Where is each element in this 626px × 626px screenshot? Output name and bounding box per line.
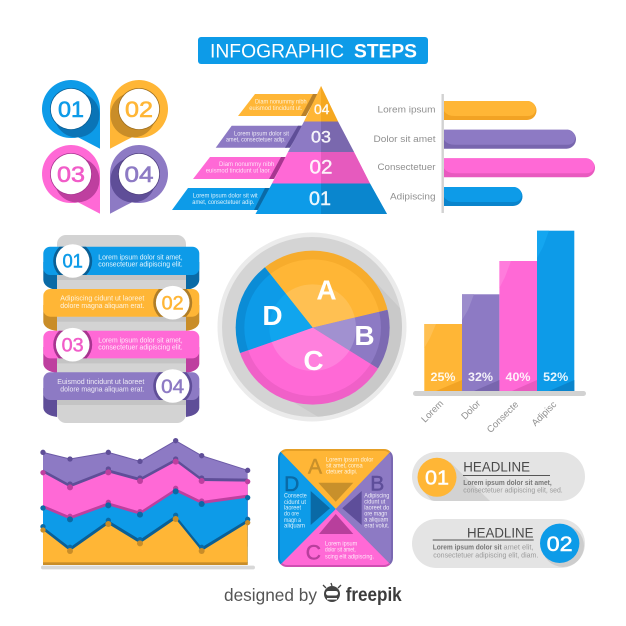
section text: laoreet do <box>364 505 390 512</box>
pyramid numbers: 03 <box>311 128 331 147</box>
step 01 band <box>43 242 199 290</box>
horizontal bar chart <box>374 94 595 213</box>
section text: Lorem ipsum dolor <box>326 456 374 463</box>
yellow layer <box>43 519 248 565</box>
section text: ctetuer adipi. <box>326 468 357 475</box>
section text <box>284 456 390 560</box>
headline pill 02: consectetuer adipiscing elit, diam. <box>433 550 538 559</box>
data points <box>40 438 250 487</box>
section text: laoreet <box>284 504 301 511</box>
step 03 band: Lorem ipsum dolor sit amet, <box>98 336 183 345</box>
ribbon 02: Diam nonummy nibh <box>219 161 274 168</box>
ribbon 04 <box>238 94 320 116</box>
footer credit <box>224 583 402 606</box>
pyramid layers <box>304 86 338 122</box>
blue layer <box>43 491 248 563</box>
pin 03: 03 <box>57 162 85 187</box>
column baseline <box>413 391 586 396</box>
bar labels: Lorem ipsum <box>378 104 436 116</box>
pin 04: 04 <box>124 162 154 187</box>
bar labels: Dolor sit amet <box>374 134 436 145</box>
yellow layer edge <box>43 515 248 563</box>
pie chart <box>218 232 406 422</box>
pie letters: B <box>354 320 375 351</box>
numbered location pins <box>42 80 168 214</box>
column labels <box>419 398 559 436</box>
pie letters: C <box>303 345 324 376</box>
ribbon 01: Lorem ipsum dolor sit wit <box>193 192 258 199</box>
pyramid numbers: 01 <box>309 189 331 210</box>
bar: lorem ipsum <box>444 101 536 120</box>
column 40%: 40% <box>506 372 530 384</box>
pie backing disc <box>218 232 406 422</box>
ribbon 02 <box>193 157 286 179</box>
section text: magn a <box>284 517 301 524</box>
section text: ore magn <box>364 510 388 518</box>
grey backing <box>57 235 186 423</box>
column 52%: 52% <box>543 372 568 384</box>
column 32%: 32% <box>468 372 493 384</box>
footer credit: freepik <box>346 585 402 606</box>
pyramid numbers: 02 <box>310 157 332 178</box>
ribbon 01: amet, consectetuer adip. <box>192 199 254 206</box>
section text: cidunt ut <box>364 499 385 506</box>
section text: aliquam <box>284 523 305 530</box>
title <box>198 37 428 64</box>
section text: dolor sit amet, <box>325 547 356 554</box>
section text: scing elit adipiscing. <box>325 553 374 560</box>
pie letters: A <box>316 274 337 306</box>
blue layer edge <box>43 488 248 547</box>
area baseline <box>41 566 255 569</box>
step 03 band: consectetuer adipiscing elit. <box>98 343 183 352</box>
headline pill 02: 02 <box>547 533 573 556</box>
ribbon 04: euismod tincidunt ut. <box>249 105 302 112</box>
ribbon 03: Lorem ipsum dolor sit <box>234 131 289 138</box>
step 01 band: consectetuer adipiscing elit. <box>98 259 183 268</box>
icon: freepik robot <box>323 583 341 602</box>
bar: dolor sit amet <box>444 130 576 149</box>
inner triangles <box>318 483 353 502</box>
pink layer edge <box>43 459 248 530</box>
pyramid chart <box>172 86 387 214</box>
step 04 band: Euismod tincidunt ut laoreet <box>57 377 144 386</box>
axis <box>442 94 444 213</box>
ribbon 02: euismod tincidunt ut laor. <box>206 167 271 174</box>
column 25% <box>424 324 462 391</box>
pink layer <box>43 462 248 530</box>
column 40% <box>499 261 537 391</box>
square faces <box>278 449 393 567</box>
purple layer <box>43 441 248 530</box>
section text: Adipiscing <box>364 492 390 500</box>
section text: cidunt ut <box>284 499 306 506</box>
pyramid numbers: 04 <box>314 101 330 117</box>
column labels: Dolor <box>459 398 483 422</box>
bar labels: Adipiscing <box>390 192 436 202</box>
bar labels <box>374 104 436 202</box>
square dark edges <box>278 449 393 567</box>
column labels: Lorem <box>419 398 446 425</box>
footer credit: designed by <box>224 585 317 605</box>
step 02 band: Adipiscing cidunt ut laoreet <box>60 294 144 303</box>
column 52% <box>537 231 574 391</box>
ribbon 01 <box>172 188 270 210</box>
ABCD square diagram <box>278 449 393 567</box>
ribbon 03: amet, consectetuer adip. <box>226 137 286 144</box>
bar: consectetuer <box>444 158 595 177</box>
step 02 band <box>43 283 199 331</box>
bar: adipiscing <box>444 187 522 206</box>
step 02 band: dolore magna aliquam erat. <box>60 301 144 310</box>
pie letters: D <box>262 300 283 331</box>
headline pill 02: amet elit, <box>504 542 534 551</box>
section text: erat volut. <box>364 523 389 530</box>
ABCD square diagram: D <box>284 473 299 496</box>
section text: Consecte <box>284 493 307 500</box>
ribbon list <box>43 235 199 423</box>
pin 01: 01 <box>58 97 84 122</box>
headline pill 01 <box>412 452 585 501</box>
column chart <box>413 231 586 436</box>
step 04 band: dolore magna aliquam erat. <box>60 384 144 393</box>
headline pill 01: HEADLINE <box>463 459 530 475</box>
pie slices <box>236 250 390 405</box>
headline pill 02 <box>412 519 585 568</box>
section letters: A <box>308 456 322 478</box>
bar labels: Consectetuer <box>378 162 436 173</box>
ABCD square diagram: B <box>370 472 384 496</box>
step 01 band: 01 <box>62 252 83 272</box>
stacked area chart <box>40 438 255 569</box>
pyramid numbers <box>309 101 332 210</box>
ribbon 03 <box>216 126 303 148</box>
headline pill 01: 01 <box>425 468 449 490</box>
step 04 band <box>43 366 199 417</box>
headline pill 01: consectetuer adipiscing elit, sed. <box>463 486 563 495</box>
pie letters <box>262 274 375 376</box>
title: INFOGRAPHIC <box>210 41 344 62</box>
section text: Lorem ipsum <box>325 541 358 548</box>
step 04 band: 04 <box>161 377 185 398</box>
column 32% <box>462 294 499 391</box>
pin 02: 02 <box>125 97 153 122</box>
ribbon 04: Diam nonummy nibh <box>255 99 307 106</box>
ABCD square diagram: C <box>306 542 321 564</box>
section text: sit amet, consa <box>326 462 363 469</box>
headline pill 02: Lorem ipsum dolor sit <box>433 542 502 551</box>
step 02 band: 02 <box>162 294 184 314</box>
column labels: Consecte <box>485 399 521 436</box>
headline pill 01: Lorem ipsum dolor sit amet, <box>463 478 552 487</box>
title: STEPS <box>354 41 417 62</box>
headline pill 02: HEADLINE <box>467 525 534 541</box>
section text: a aliquam <box>364 517 389 524</box>
column 25%: 25% <box>430 372 456 384</box>
step 01 band: Lorem ipsum dolor sit amet, <box>98 252 183 261</box>
column labels: Adipisc <box>530 399 559 429</box>
step 03 band: 03 <box>62 336 84 356</box>
section text: do ore <box>284 511 299 518</box>
step 03 band <box>43 325 199 373</box>
